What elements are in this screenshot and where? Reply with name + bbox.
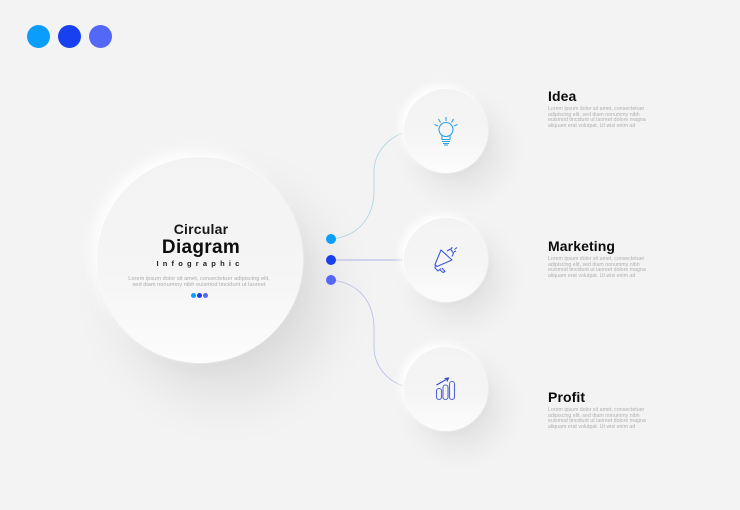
- description: Marketing: aliquam erat volutpat. Ut wisi enim ad: [548, 273, 635, 279]
- palette dots: [27, 25, 112, 48]
- heading: Marketing: Marketing: [548, 238, 615, 254]
- connector: to Idea: [332, 133, 403, 239]
- description: Marketing: euismod tincidunt ut laoreet dolore magna: [548, 267, 646, 273]
- icon: megaphone: [434, 246, 458, 273]
- icon: bar chart with arrow: [436, 377, 456, 400]
- description: Idea: adipiscing elit, sed diam nonummy nibh: [548, 112, 640, 118]
- icon: light bulb: [434, 117, 458, 146]
- description: Idea: Lorem ipsum dolor sit amet, consectetuer: [548, 106, 644, 112]
- palette dot: royal blue: [58, 25, 81, 48]
- connector: to Marketing: [332, 259, 403, 261]
- description: Profit: euismod tincidunt ut laoreet dolore magna: [548, 418, 646, 424]
- subheading: Infographic: Infographic: [156, 259, 244, 268]
- description: Idea: aliquam erat volutpat. Ut wisi enim ad: [548, 123, 635, 129]
- description: Marketing: adipiscing elit, sed diam nonummy nibh: [548, 262, 640, 268]
- description text: Lorem ipsum dolor sit amet, consectetuer adipiscing elit,: [128, 276, 270, 282]
- palette dot: periwinkle: [89, 25, 112, 48]
- connector node: periwinkle: [326, 275, 336, 285]
- description: Marketing: Lorem ipsum dolor sit amet, consectetuer: [548, 256, 644, 262]
- heading: Diagram: Diagram: [162, 237, 240, 258]
- description: Profit: [548, 407, 646, 430]
- panel: Profit circle: [404, 347, 488, 431]
- description text: sed diam nonummy nibh euismod tincidunt ut laoreet: [132, 282, 266, 288]
- three small dots: [191, 293, 208, 298]
- text block: Profit: [548, 389, 646, 430]
- description: Profit: aliquam erat volutpat. Ut wisi enim ad: [548, 424, 635, 430]
- connector node: sky blue: [326, 234, 336, 244]
- text block: Idea: [548, 88, 646, 129]
- panel: Marketing circle: [404, 218, 488, 302]
- description: Marketing: [548, 256, 646, 279]
- panel: Idea circle: [404, 89, 488, 173]
- panel: central circle: [97, 157, 303, 363]
- heading: Idea: Idea: [548, 88, 576, 104]
- description: Idea: [548, 106, 646, 129]
- central title block: [128, 221, 270, 298]
- description: Profit: adipiscing elit, sed diam nonummy nibh: [548, 413, 640, 419]
- palette dot: sky blue: [27, 25, 50, 48]
- heading: Profit: Profit: [548, 389, 585, 405]
- connector: to Profit: [332, 280, 403, 386]
- description text: [128, 276, 270, 288]
- heading: Circular: Circular: [174, 221, 228, 237]
- text block: Marketing: [548, 238, 646, 279]
- connector node: royal blue: [326, 255, 336, 265]
- description: Idea: euismod tincidunt ut laoreet dolore magna: [548, 117, 646, 123]
- description: Profit: Lorem ipsum dolor sit amet, consectetuer: [548, 407, 644, 413]
